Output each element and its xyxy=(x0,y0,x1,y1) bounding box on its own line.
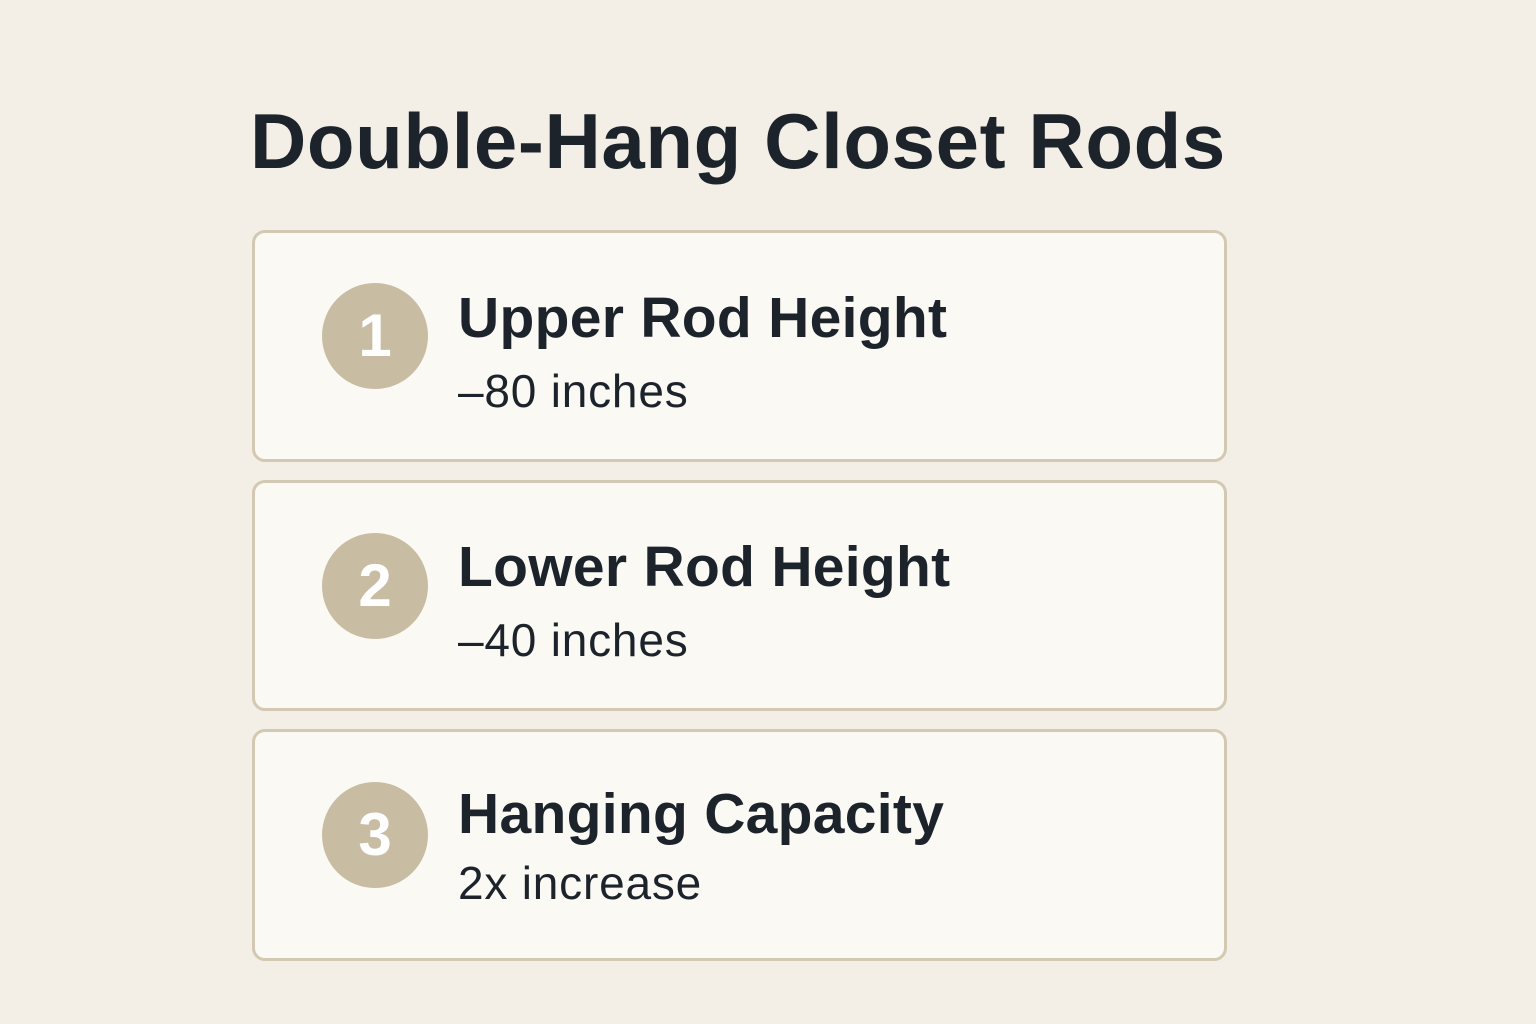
heading: upper rod height: Upper Rod Height xyxy=(458,286,947,350)
panel: hanging capacity xyxy=(252,729,1227,961)
text: 80 inches: –80 inches xyxy=(458,365,688,417)
icon: number 1: 1 xyxy=(358,302,392,369)
heading: lower rod height: Lower Rod Height xyxy=(458,535,950,599)
panel: upper rod height xyxy=(252,230,1227,462)
icon: number 2: 2 xyxy=(358,552,392,619)
text: 40 inches: –40 inches xyxy=(458,614,688,666)
icon: number 2 xyxy=(322,533,428,639)
icon: number 1 xyxy=(322,283,428,389)
heading: hanging capacity: Hanging Capacity xyxy=(458,782,944,846)
panel: lower rod height xyxy=(252,480,1227,711)
icon: number 3: 3 xyxy=(358,801,392,868)
icon: number 3 xyxy=(322,782,428,888)
text: 2x increase: 2x increase xyxy=(458,857,702,909)
title: Double-Hang Closet Rods xyxy=(250,97,1226,185)
